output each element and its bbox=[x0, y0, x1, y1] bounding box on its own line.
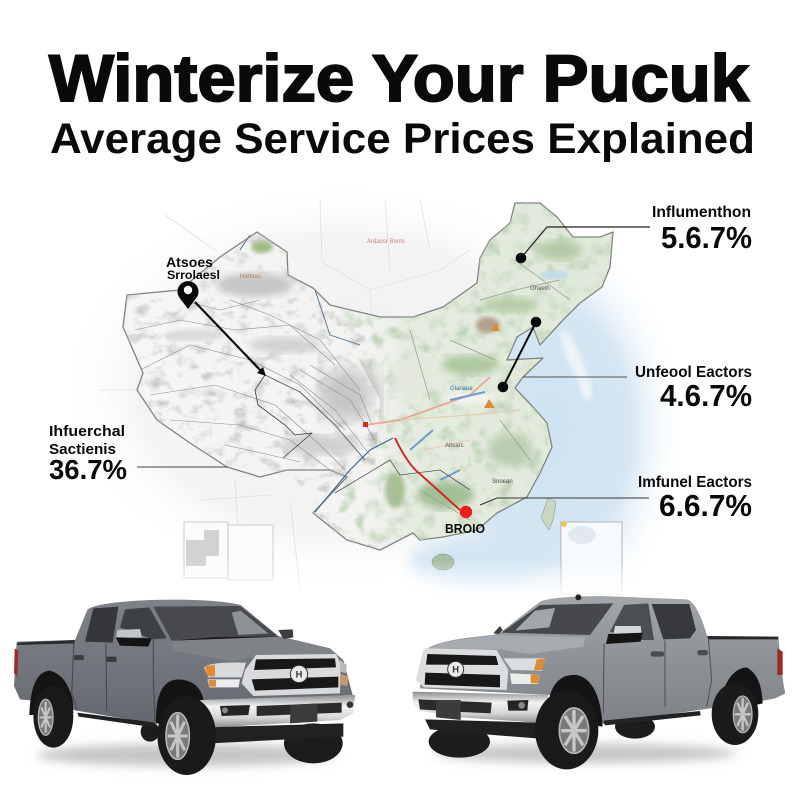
callout: Imfunel Eactors: Imfunel Eactors bbox=[638, 474, 752, 491]
orange markers bbox=[484, 323, 500, 408]
front bumper bbox=[413, 692, 548, 738]
small faded map labels: Ghaeth bbox=[530, 286, 550, 292]
eastern green terrain bbox=[320, 200, 620, 550]
small faded map labels: Glanaue bbox=[450, 386, 473, 392]
headlights bbox=[204, 660, 348, 687]
land mass bbox=[123, 203, 613, 550]
callout: red route and marker bbox=[363, 422, 485, 536]
ground shadow bbox=[437, 743, 737, 763]
small faded map labels: Harloas bbox=[240, 274, 261, 280]
icon: map pin bbox=[178, 281, 198, 309]
callout: Imfunel Eactors bbox=[480, 474, 752, 523]
pin label: Atsoes bbox=[166, 255, 213, 270]
near wheels bbox=[33, 686, 216, 775]
faint neighbouring borders bbox=[100, 200, 470, 590]
mirrors bbox=[116, 629, 293, 647]
near wheels bbox=[535, 683, 758, 769]
callout: Ihfuerchal Sactienis: 36.7% bbox=[49, 454, 127, 485]
small faded map labels: Snoean bbox=[492, 479, 513, 485]
door handles bbox=[74, 655, 117, 662]
callout: Imfunel Eactors: 6.6.7% bbox=[659, 488, 752, 523]
front bumper bbox=[200, 695, 355, 743]
far wheels bbox=[429, 715, 655, 758]
body shading: hood and door seams bbox=[425, 635, 585, 654]
front grille bbox=[416, 648, 508, 690]
callout: Ihfuerchal Sactienis bbox=[49, 423, 228, 485]
callout: Ihfuerchal Sactienis: Sactienis bbox=[49, 441, 116, 458]
door handles bbox=[651, 650, 708, 657]
callout: Unfeool Eactors bbox=[498, 317, 752, 413]
callout: pin with arrow bbox=[166, 255, 266, 376]
callout: red route and marker: BROIO bbox=[445, 521, 485, 536]
truck body bbox=[420, 596, 785, 724]
ocean bbox=[440, 245, 690, 615]
front grille: H bbox=[452, 665, 459, 675]
windows bbox=[85, 606, 278, 643]
fade into white above trucks bbox=[0, 560, 800, 600]
running board bbox=[77, 713, 155, 727]
running board bbox=[603, 711, 701, 725]
front grille: H bbox=[296, 669, 303, 679]
title: Winterize Your Pucuk bbox=[49, 41, 749, 115]
truck: left, facing right bbox=[14, 600, 355, 775]
truck body bbox=[14, 600, 353, 724]
island: Hainan bbox=[432, 554, 454, 570]
western grey terrain bbox=[120, 230, 390, 550]
callout: Unfeool Eactors: 4.6.7% bbox=[660, 378, 752, 413]
small faded map labels bbox=[240, 239, 550, 485]
mirror bbox=[606, 626, 643, 644]
front grille bbox=[242, 654, 341, 696]
body shading: hood and door seams bbox=[172, 636, 338, 662]
small faded map labels: Ardaosr Bonts bbox=[367, 239, 405, 245]
callout: Unfeool Eactors: Unfeool Eactors bbox=[635, 364, 752, 381]
inset map right bbox=[561, 521, 622, 594]
wheel arches bbox=[29, 671, 204, 727]
small faded map labels: Ansarc bbox=[445, 443, 464, 449]
callout: Ihfuerchal Sactienis: Ihfuerchal bbox=[49, 423, 125, 440]
southern sea bbox=[410, 534, 550, 590]
pin label: Srrolaesl bbox=[167, 270, 220, 282]
inset map left bbox=[184, 522, 273, 580]
mountain ridge lines bbox=[135, 300, 375, 470]
rivers and roads bbox=[240, 235, 570, 520]
truck: right, facing left bbox=[413, 594, 785, 769]
headlights bbox=[503, 658, 545, 684]
callout: Influmenthon: Influmenthon bbox=[652, 204, 751, 221]
faint surrounding terrain bbox=[60, 180, 630, 590]
callout: Influmenthon bbox=[516, 204, 752, 263]
arrow bbox=[195, 302, 266, 376]
map of China with terrain bbox=[100, 200, 662, 594]
ground shadow bbox=[37, 744, 337, 766]
far wheels bbox=[141, 722, 343, 763]
callout: Influmenthon: 5.6.7% bbox=[661, 220, 752, 255]
wheel arches bbox=[547, 667, 763, 727]
windows bbox=[493, 594, 696, 640]
island: Taiwan bbox=[541, 498, 556, 530]
white ground behind trucks bbox=[0, 600, 800, 800]
pin label bbox=[166, 255, 220, 282]
island: pale eastern island bbox=[560, 330, 592, 400]
subtitle: Average Service Prices Explained bbox=[50, 115, 755, 163]
